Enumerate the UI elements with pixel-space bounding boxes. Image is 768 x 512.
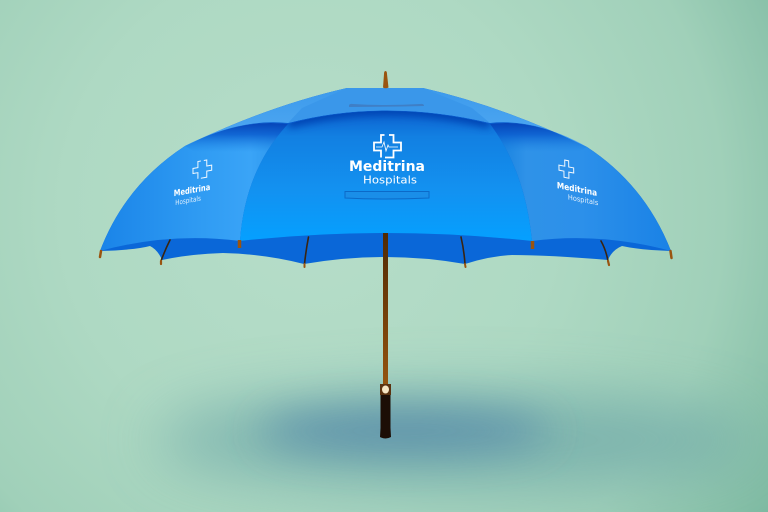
right logo [556, 158, 599, 207]
ground shadow [155, 392, 755, 488]
canopy underside [100, 225, 671, 264]
brand subtitle: Hospitals [175, 193, 201, 207]
icon: medical cross [559, 159, 574, 179]
right vent shadow [490, 123, 587, 152]
brand name: Meditrina [349, 159, 425, 175]
center canopy panel [240, 111, 532, 241]
center velcro strap [345, 192, 429, 199]
left canopy panel [100, 123, 288, 251]
right canopy panel [490, 123, 671, 251]
cap center facet [288, 88, 490, 123]
brand subtitle: Hospitals [363, 174, 417, 186]
brand name: Meditrina [174, 183, 210, 199]
top strap [349, 104, 424, 107]
icon: medical cross [193, 159, 212, 180]
brand subtitle: Hospitals [568, 192, 599, 207]
left logo [174, 159, 212, 207]
center logo [349, 135, 425, 186]
brand name: Meditrina [557, 181, 597, 199]
icon: medical cross [374, 135, 401, 158]
umbrella handle [380, 384, 391, 438]
left vent shadow [185, 123, 288, 152]
finial [383, 71, 388, 88]
umbrella shaft [383, 233, 388, 386]
ribs [100, 237, 672, 267]
upper canopy cap [185, 88, 587, 147]
canopy base [100, 88, 671, 251]
